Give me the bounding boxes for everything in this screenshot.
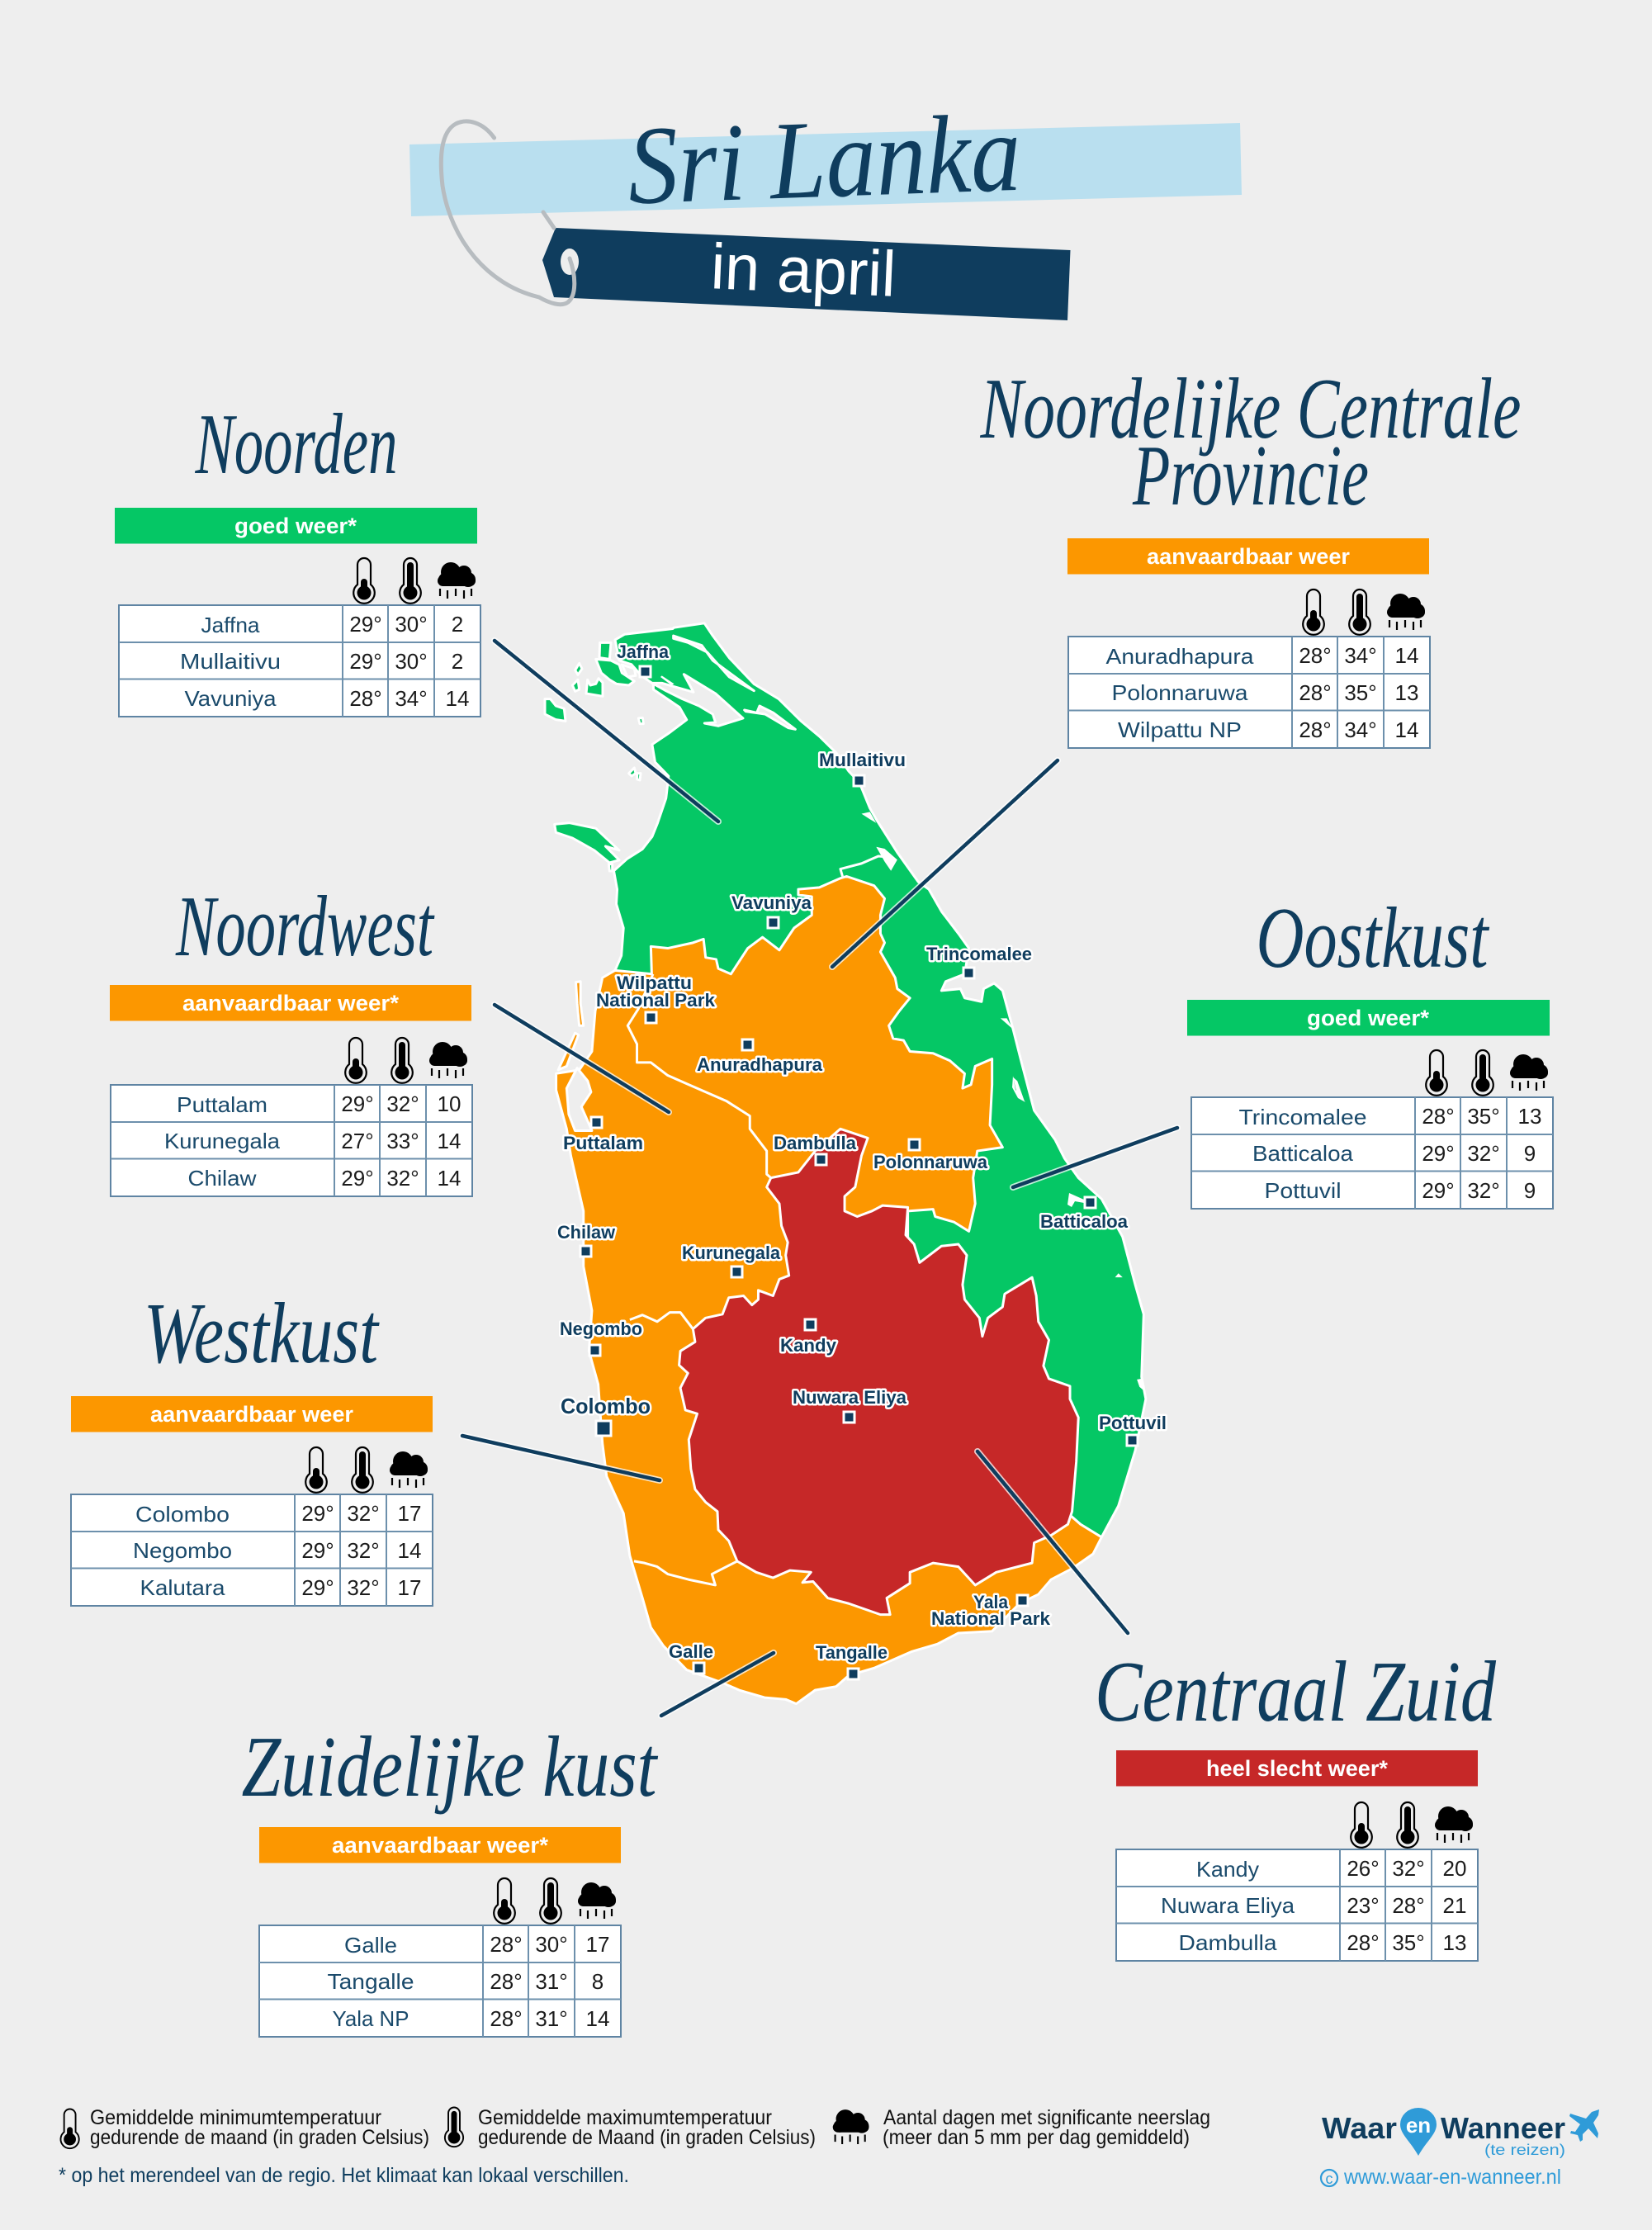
panel: Noorden	[115, 395, 480, 717]
weather table: 29°	[1422, 1141, 1455, 1166]
weather table: 14	[438, 1166, 461, 1191]
legend: rain days: (meer dan 5 mm per dag gemiddeld)	[883, 2126, 1190, 2149]
legend: maximum temperature: Gemiddelde maximumtemperatuur	[478, 2106, 772, 2129]
weather table: Kalutara	[140, 1575, 225, 1600]
weather table: 20	[1443, 1856, 1466, 1881]
weather table: 30°	[535, 1932, 568, 1957]
weather table: 32°	[1467, 1141, 1500, 1166]
weather table: 32°	[347, 1575, 380, 1600]
weather table: 35°	[1467, 1104, 1500, 1129]
weather table: 13	[1395, 680, 1418, 705]
logo: Waar en Wanneer: (te reizen)	[1484, 2142, 1565, 2158]
city labels: Galle	[669, 1641, 713, 1662]
weather table: 14	[1395, 643, 1418, 668]
heading: Westkust: Westkust	[144, 1285, 380, 1381]
city labels: Batticaloa	[1040, 1211, 1129, 1232]
panel: Oostkust	[1187, 889, 1553, 1209]
weather table: Dambulla	[1179, 1930, 1277, 1955]
legend: minimum temperature	[60, 2106, 429, 2149]
weather table	[259, 1878, 621, 2037]
weather table: 30°	[395, 649, 428, 674]
weather table: 29°	[341, 1166, 374, 1191]
weather table: 32°	[347, 1501, 380, 1526]
weather table: Trincomalee	[1238, 1105, 1367, 1129]
weather table: 10	[438, 1091, 461, 1116]
weather table: Pottuvil	[1265, 1178, 1341, 1203]
weather table: 28°	[1392, 1893, 1425, 1918]
weather table: Tangalle	[327, 1969, 414, 1994]
weather table: Jaffna	[201, 613, 260, 637]
weather table: 26°	[1347, 1856, 1380, 1881]
city labels: Vavuniya	[731, 892, 812, 913]
Puttalam lagoon	[566, 1068, 592, 1131]
weather table	[1116, 1802, 1478, 1961]
weather table: Yala NP	[332, 2006, 409, 2031]
green regions: north and east	[613, 623, 1146, 1537]
status bar	[259, 1827, 621, 1863]
status bar	[1187, 1000, 1550, 1035]
city labels: Tangalle	[816, 1642, 888, 1663]
weather table	[119, 558, 480, 717]
city labels: Anuradhapura	[697, 1054, 823, 1075]
weather table: 9	[1524, 1141, 1536, 1166]
city labels: Kandy	[780, 1335, 837, 1356]
Jaffna lagoons	[652, 675, 743, 726]
legend: minimum temperature: Gemiddelde minimumtemperatuur	[90, 2106, 381, 2129]
city labels: Pottuvil	[1099, 1413, 1167, 1433]
status bar	[1116, 1750, 1478, 1787]
city labels: Nuwara Eliya	[793, 1387, 907, 1408]
weather table: 14	[586, 2006, 609, 2031]
status bar: aanvaardbaar weer*	[332, 1833, 549, 1858]
city labels: Wilpattu	[617, 973, 692, 993]
weather table: 28°	[490, 1932, 523, 1957]
weather table: 28°	[1299, 643, 1332, 668]
legend: rain days: Aantal dagen met significante neerslag	[883, 2106, 1210, 2129]
status bar	[110, 985, 471, 1020]
city labels: Chilaw	[557, 1222, 616, 1243]
weather table: 28°	[349, 686, 382, 711]
weather table: 13	[1518, 1104, 1541, 1129]
website: www.waar-en-wanneer.nl	[1343, 2166, 1561, 2189]
weather table: 8	[592, 1969, 604, 1994]
weather table: 34°	[1344, 717, 1377, 742]
city labels: Jaffna	[617, 642, 670, 662]
city labels: Colombo	[561, 1394, 651, 1418]
weather table: 32°	[386, 1166, 419, 1191]
footnote: * op het merendeel van de regio. Het klimaat kan lokaal verschillen.	[59, 2164, 629, 2187]
status bar: goed weer*	[234, 514, 357, 538]
weather table: 14	[1395, 717, 1418, 742]
weather table: 34°	[1344, 643, 1377, 668]
weather table: 32°	[1392, 1856, 1425, 1881]
weather table: Chilaw	[188, 1166, 257, 1191]
weather table: 27°	[341, 1129, 374, 1153]
weather table: 23°	[1347, 1893, 1380, 1918]
weather table: 35°	[1392, 1930, 1425, 1955]
city labels: Kurunegala	[682, 1243, 781, 1263]
Batticaloa lagoon	[1067, 1193, 1084, 1207]
weather table: 35°	[1344, 680, 1377, 705]
weather table: 28°	[1299, 680, 1332, 705]
weather table: 14	[398, 1538, 421, 1563]
legend: maximum temperature	[445, 2106, 816, 2149]
title: Sri Lanka: Sri Lanka	[626, 92, 1023, 228]
panel: Westkust	[71, 1285, 433, 1606]
weather table: Colombo	[135, 1502, 230, 1527]
heading: Oostkust: Oostkust	[1257, 889, 1490, 986]
weather table: 28°	[490, 2006, 523, 2031]
weather table: Vavuniya	[185, 686, 277, 711]
panel: Noordelijke Centrale Provincie	[980, 360, 1521, 748]
city labels: National Park	[596, 990, 716, 1011]
city labels: Puttalam	[563, 1133, 643, 1153]
status bar	[1067, 538, 1429, 575]
weather table: 33°	[386, 1129, 419, 1153]
city labels: Negombo	[560, 1319, 642, 1339]
heading: Noordelijke Centrale Provincie	[980, 360, 1521, 523]
weather table: 13	[1443, 1930, 1466, 1955]
weather table: 28°	[1422, 1104, 1455, 1129]
panel: Centraal Zuid	[1095, 1643, 1496, 1961]
legend: maximum temperature: gedurende de Maand (in graden Celsius)	[478, 2126, 816, 2149]
weather table	[1068, 589, 1430, 748]
weather table: Kandy	[1196, 1857, 1259, 1882]
weather table: 29°	[349, 649, 382, 674]
logo: Waar en Wanneer: Wanneer	[1441, 2111, 1565, 2145]
weather table: 29°	[301, 1501, 334, 1526]
status bar: heel slecht weer*	[1206, 1756, 1388, 1781]
panel: Noordwest	[110, 878, 472, 1196]
city labels: Trincomalee	[926, 944, 1032, 964]
legend: minimum temperature: gedurende de maand (in graden Celsius)	[90, 2126, 429, 2149]
weather table: 17	[586, 1932, 609, 1957]
city markers	[580, 666, 1138, 1679]
logo: Waar en Wanneer: en	[1406, 2113, 1431, 2138]
green boundary line	[840, 856, 888, 876]
heading: Centraal Zuid: Centraal Zuid	[1095, 1643, 1496, 1740]
weather table: 14	[438, 1129, 461, 1153]
status bar	[115, 508, 477, 543]
status bar: aanvaardbaar weer*	[182, 991, 400, 1016]
weather table	[71, 1447, 433, 1606]
legend: rain days	[833, 2106, 1210, 2149]
weather table: Batticaloa	[1252, 1141, 1354, 1166]
weather table: Negombo	[133, 1538, 232, 1563]
east coast lagoon	[1012, 1076, 1025, 1102]
city labels: Mullaitivu	[819, 750, 906, 770]
status bar: goed weer*	[1307, 1006, 1430, 1030]
panel: Zuidelijke kust	[241, 1718, 659, 2037]
logo: Waar en Wanneer: Waar	[1322, 2111, 1397, 2145]
website: c	[1326, 2171, 1332, 2187]
weather table: 32°	[386, 1091, 419, 1116]
weather table: 28°	[1347, 1930, 1380, 1955]
coastal lagoons	[861, 812, 876, 823]
weather table: Galle	[344, 1933, 397, 1958]
city labels: Yala	[973, 1592, 1009, 1612]
weather table: 28°	[490, 1969, 523, 1994]
weather table: Wilpattu NP	[1118, 717, 1242, 742]
weather table: 14	[446, 686, 469, 711]
weather table: Anuradhapura	[1106, 644, 1254, 669]
heading: Noordelijke Centrale Provincie: Provincie	[1132, 427, 1369, 523]
weather table: 31°	[535, 2006, 568, 2031]
weather table: 2	[452, 649, 463, 674]
Jaffna islands and Mannar	[599, 642, 611, 659]
weather table: 30°	[395, 612, 428, 637]
status bar: aanvaardbaar weer	[1147, 544, 1350, 569]
weather table	[111, 1038, 472, 1196]
weather table: 17	[398, 1575, 421, 1600]
legend	[59, 2106, 1210, 2187]
heading: Noordwest: Noordwest	[175, 878, 435, 974]
title block	[409, 92, 1242, 320]
weather table: 2	[452, 612, 463, 637]
region boundary lines	[627, 974, 771, 1178]
weather table: 31°	[535, 1969, 568, 1994]
subtitle: in april: in april	[709, 230, 897, 310]
weather table: 32°	[1467, 1178, 1500, 1203]
weather table	[1191, 1050, 1553, 1209]
city labels	[557, 642, 1167, 1663]
weather table: 32°	[347, 1538, 380, 1563]
dark tag	[542, 228, 1070, 320]
tag string	[441, 121, 575, 305]
weather table: 29°	[1422, 1178, 1455, 1203]
leader lines	[462, 641, 1177, 1716]
orange regions	[556, 876, 1101, 1704]
tag hole	[561, 249, 579, 275]
weather table: Nuwara Eliya	[1161, 1893, 1295, 1918]
status bar: aanvaardbaar weer	[150, 1402, 353, 1427]
weather table: Polonnaruwa	[1111, 680, 1248, 705]
city labels: National Park	[931, 1608, 1051, 1629]
weather table: Kurunegala	[164, 1129, 281, 1153]
weather table: 28°	[1299, 717, 1332, 742]
map of Sri Lanka	[545, 623, 1146, 1704]
weather table: 29°	[349, 612, 382, 637]
city labels: Polonnaruwa	[873, 1152, 988, 1172]
red central region	[679, 1129, 1078, 1615]
weather table: 29°	[301, 1538, 334, 1563]
logo: Waar en Wanneer	[1321, 2108, 1599, 2189]
weather table: Mullaitivu	[180, 649, 281, 674]
heading: Noorden: Noorden	[195, 395, 398, 492]
icon: airplane	[1569, 2109, 1599, 2142]
weather table: 29°	[301, 1575, 334, 1600]
weather table: 29°	[341, 1091, 374, 1116]
weather table: 9	[1524, 1178, 1536, 1203]
weather table: 21	[1443, 1893, 1466, 1918]
status bar	[71, 1396, 433, 1432]
heading: Zuidelijke kust: Zuidelijke kust	[241, 1718, 659, 1815]
city labels: Dambulla	[774, 1133, 857, 1153]
weather table: 34°	[395, 686, 428, 711]
weather table: Puttalam	[177, 1092, 267, 1117]
weather table: 17	[398, 1501, 421, 1526]
title banner	[409, 123, 1242, 216]
icon: location pin	[1400, 2108, 1437, 2156]
